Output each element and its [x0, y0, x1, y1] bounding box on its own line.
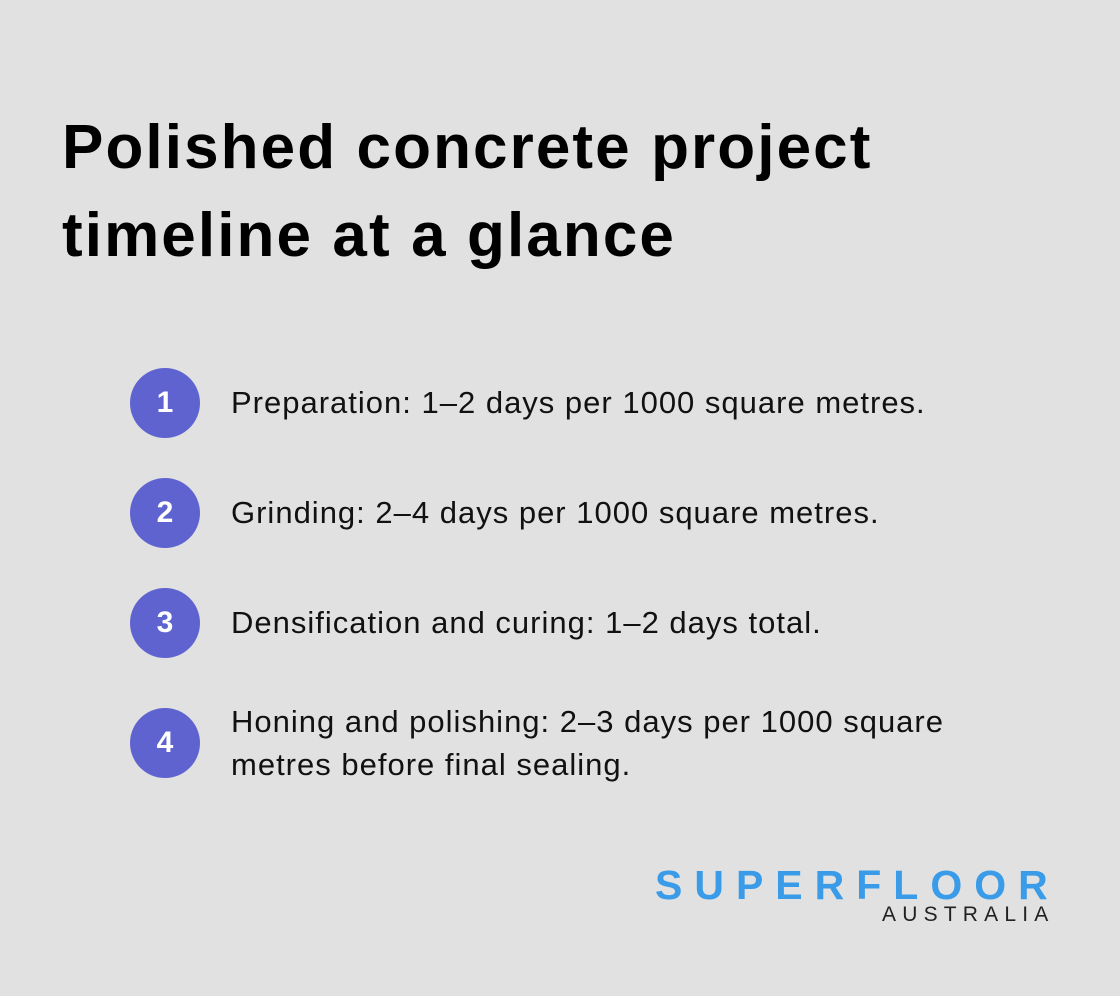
item 2	[130, 478, 880, 548]
text 4	[231, 704, 944, 782]
text 4: Honing and polishing: 2–3 days per 1000 square	[231, 704, 944, 739]
number badge 4: 4	[157, 726, 173, 759]
text 4: metres before final sealing.	[231, 747, 631, 782]
logo subtitle: AUSTRALIA	[882, 903, 1054, 926]
item 3	[130, 588, 822, 658]
logo wordmark: SUPERFLOOR	[655, 862, 1060, 908]
title: timeline at a glance	[62, 201, 676, 270]
text 3: Densification and curing: 1–2 days total.	[231, 605, 822, 640]
text 1: Preparation: 1–2 days per 1000 square metres.	[231, 385, 926, 420]
item 1	[130, 368, 926, 438]
logo	[655, 862, 1060, 926]
number badge 1	[130, 368, 200, 438]
number badge 1: 1	[157, 386, 173, 419]
number badge 2	[130, 478, 200, 548]
item 4	[130, 704, 944, 782]
number badge 4	[130, 708, 200, 778]
text 2: Grinding: 2–4 days per 1000 square metres.	[231, 495, 880, 530]
number badge 3: 3	[157, 606, 173, 639]
number badge 3	[130, 588, 200, 658]
title: Polished concrete project	[62, 113, 872, 182]
number badge 2: 2	[157, 496, 173, 529]
title	[62, 113, 872, 270]
